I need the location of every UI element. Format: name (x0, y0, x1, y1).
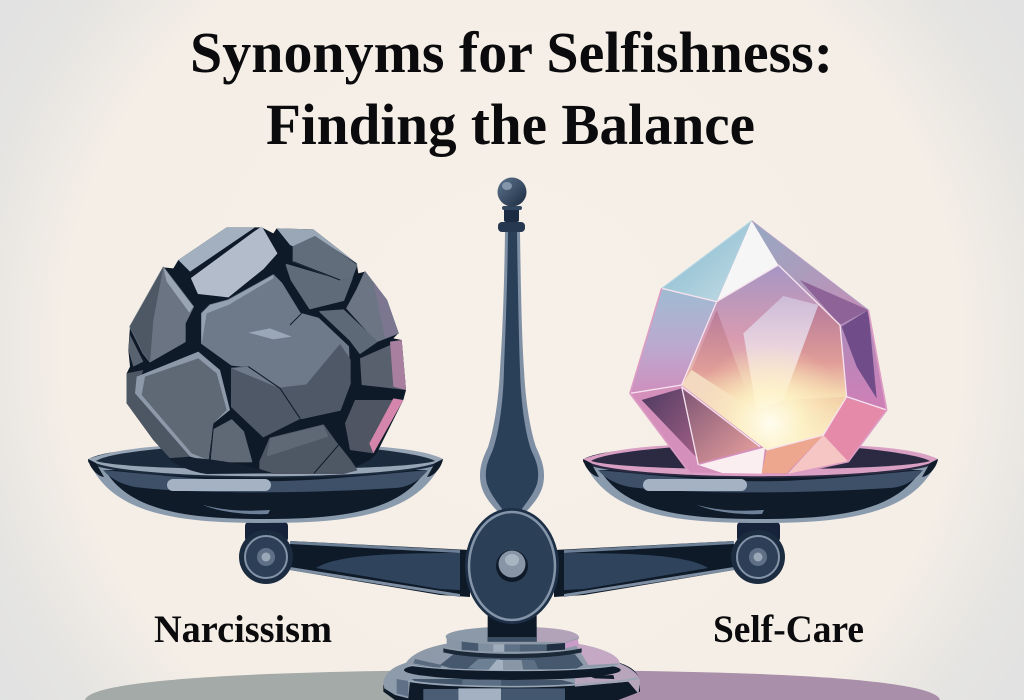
title: Synonyms for Selfishness: (190, 20, 833, 85)
glowing crystal: self-care (630, 221, 887, 475)
left pivot (239, 522, 293, 584)
label: self-care: Self-Care (713, 608, 864, 651)
title: Finding the Balance (266, 92, 755, 157)
base (383, 615, 640, 700)
right pan (583, 444, 938, 523)
beam (290, 541, 734, 597)
label: narcissism: Narcissism (154, 608, 332, 651)
title (190, 20, 833, 157)
cracked rock: narcissism (127, 227, 406, 474)
central hub (465, 508, 559, 624)
left pan (88, 444, 443, 523)
central post (480, 178, 544, 512)
right pivot (731, 522, 785, 584)
ground shadow (85, 670, 940, 700)
balance scale (239, 178, 785, 700)
